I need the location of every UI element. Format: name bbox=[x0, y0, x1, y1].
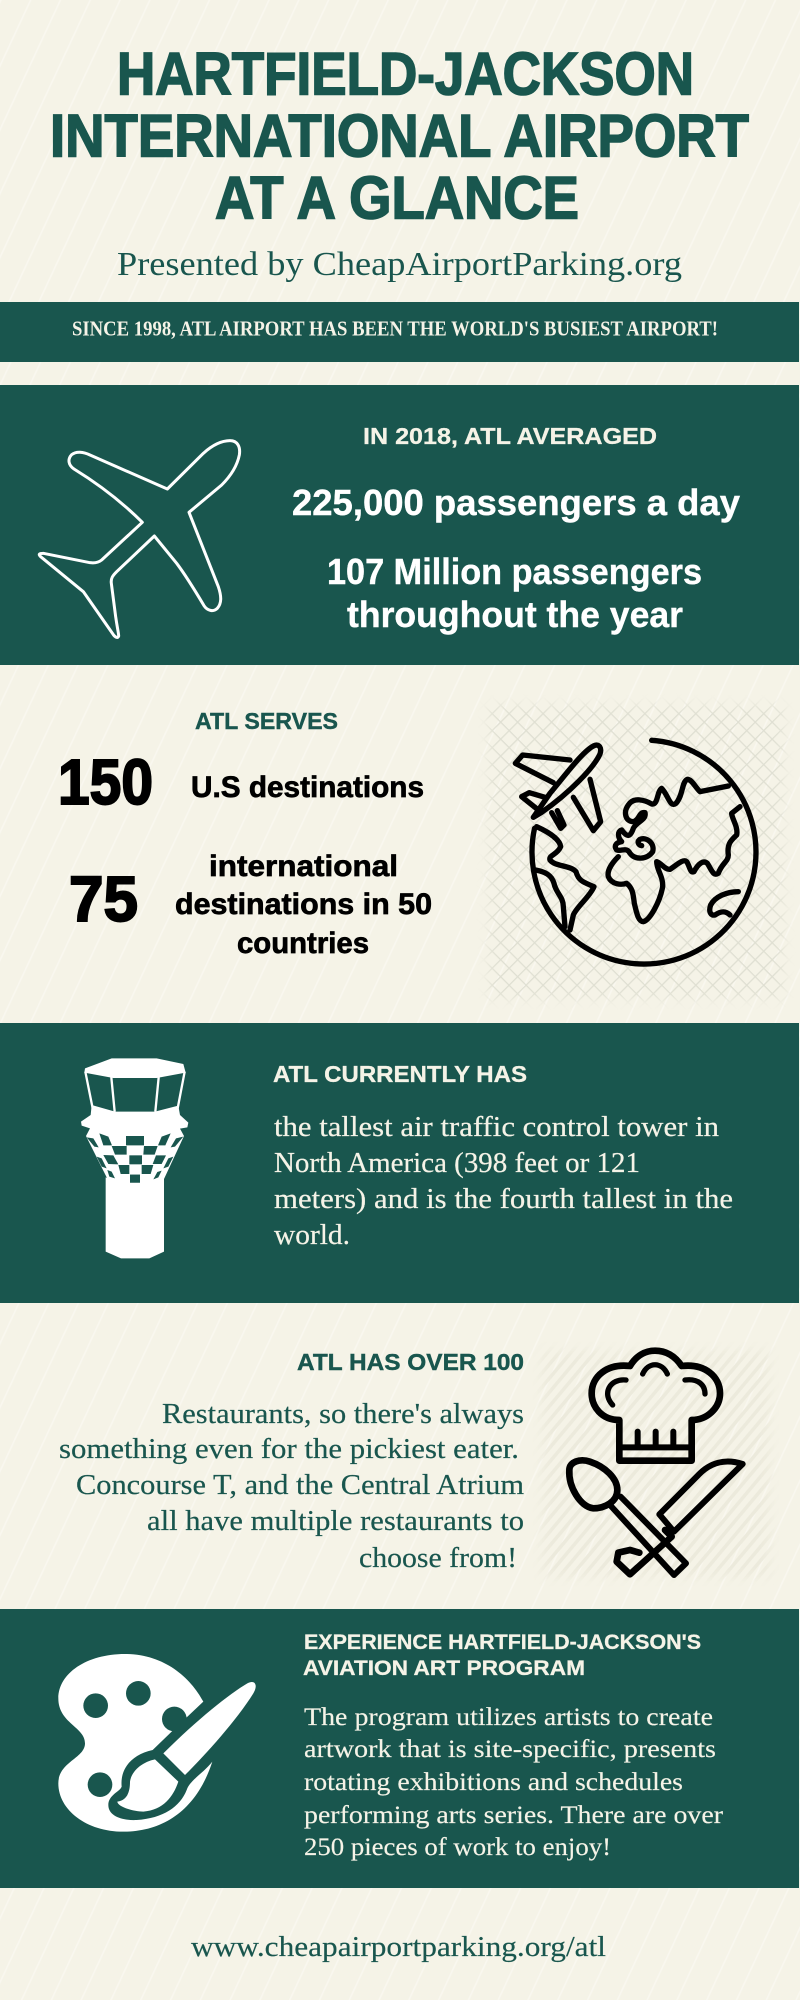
stat: 150: 150 bbox=[58, 746, 153, 818]
text: art program description: artwork that is site-specific, presents bbox=[304, 1736, 716, 1763]
text: tower description: the tallest air traffic control tower in bbox=[274, 1112, 719, 1143]
heading: aviation art program: AVIATION ART PROGRAM bbox=[303, 1657, 585, 1680]
panel: destinations bbox=[60, 702, 787, 1002]
title bbox=[50, 40, 749, 232]
panel: passengers bbox=[0, 385, 799, 665]
banner: SINCE 1998, ATL AIRPORT HAS BEEN THE WORLD'S BUSIEST AIRPORT! bbox=[72, 316, 718, 340]
text: art program description bbox=[304, 1704, 724, 1861]
icon: air traffic control tower bbox=[81, 1058, 188, 1258]
text: tower description bbox=[274, 1112, 733, 1251]
text: art program description: The program utilizes artists to create bbox=[304, 1704, 713, 1731]
text: tower description: world. bbox=[274, 1220, 350, 1251]
subtitle: Presented by CheapAirportParking.org bbox=[117, 246, 682, 283]
text: restaurants description: choose from! bbox=[359, 1543, 517, 1574]
panel: control tower bbox=[0, 1023, 799, 1303]
icon: paint palette and brush bbox=[58, 1654, 256, 1832]
panel: art program bbox=[0, 1609, 799, 1888]
label: international destinations: countries bbox=[237, 927, 369, 960]
text: restaurants description: Concourse T, and the Central Atrium bbox=[76, 1470, 524, 1501]
icon: airplane outline bbox=[39, 441, 240, 637]
text: art program description: rotating exhibitions and schedules bbox=[304, 1769, 683, 1796]
text: restaurants description: something even for the pickiest eater. bbox=[59, 1434, 519, 1465]
stat: passengers a year: throughout the year bbox=[347, 594, 683, 635]
heading: atl has over 100: ATL HAS OVER 100 bbox=[297, 1349, 524, 1375]
banner bbox=[0, 302, 799, 362]
text: tower description: meters) and is the fourth tallest in the bbox=[274, 1184, 733, 1215]
text: art program description: 250 pieces of work to enjoy! bbox=[304, 1834, 611, 1861]
label: international destinations: destinations in 50 bbox=[175, 888, 432, 921]
text: tower description: North America (398 feet or 121 bbox=[274, 1148, 640, 1179]
hatch backdrop for chef icon bbox=[541, 1350, 770, 1578]
title: INTERNATIONAL AIRPORT bbox=[50, 102, 749, 170]
stat: passengers a year bbox=[327, 551, 702, 635]
label: us destinations: U.S destinations bbox=[191, 771, 424, 804]
stat: passengers a year: 107 Million passengers bbox=[327, 551, 702, 592]
heading: aviation art program bbox=[303, 1631, 701, 1680]
heading: atl serves: ATL SERVES bbox=[195, 708, 338, 734]
stat: passengers a day: 225,000 passengers a day bbox=[292, 482, 740, 523]
heading: aviation art program: EXPERIENCE HARTFIELD-JACKSON'S bbox=[304, 1631, 701, 1654]
icon: chef hat, spoon and knife bbox=[569, 1351, 743, 1575]
title: AT A GLANCE bbox=[215, 164, 579, 232]
text: restaurants description: all have multiple restaurants to bbox=[147, 1506, 524, 1537]
heading: atl currently has: ATL CURRENTLY HAS bbox=[273, 1061, 527, 1087]
text: restaurants description bbox=[59, 1399, 524, 1574]
heading: in 2018: IN 2018, ATL AVERAGED bbox=[363, 423, 657, 449]
text: art program description: performing arts series. There are over bbox=[304, 1802, 724, 1829]
title: HARTFIELD-JACKSON bbox=[117, 40, 694, 108]
icon: globe and airplane bbox=[515, 740, 756, 964]
panel: restaurants bbox=[60, 1347, 770, 1578]
stat: 75: 75 bbox=[69, 863, 138, 935]
footer url: www.cheapairportparking.org/atl bbox=[191, 1932, 606, 1963]
hatch backdrop for globe bbox=[485, 702, 787, 1002]
label: international destinations: international bbox=[209, 850, 398, 883]
label: international destinations bbox=[175, 850, 432, 960]
text: restaurants description: Restaurants, so there's always bbox=[162, 1399, 524, 1430]
